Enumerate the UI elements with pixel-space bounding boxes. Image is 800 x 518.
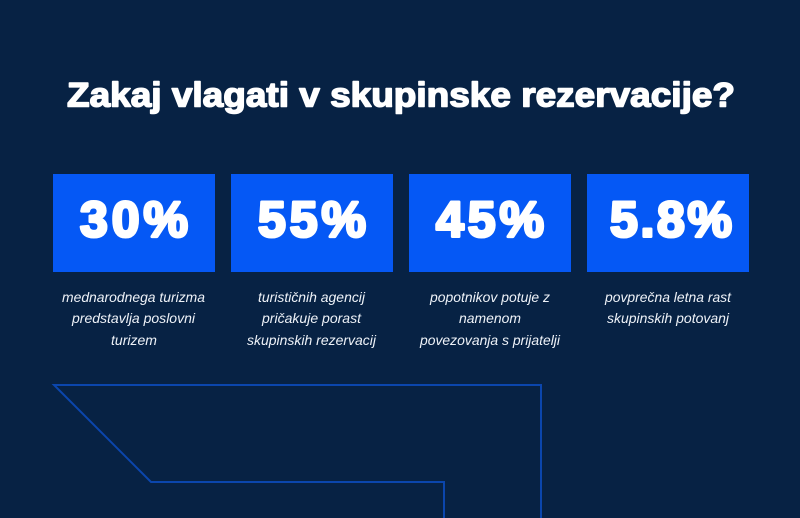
- caption 30%: [62, 289, 205, 348]
- caption 30%: mednarodnega turizma: [62, 289, 205, 305]
- caption 5.8%: povprečna letna rast: [604, 289, 732, 305]
- stat value 45%: 45%: [436, 192, 544, 248]
- caption 45%: popotnikov potuje z: [429, 289, 550, 305]
- caption 45%: [419, 289, 561, 348]
- stat value 55%: 55%: [258, 192, 366, 248]
- stat box 55%: [231, 174, 393, 272]
- panel: stat 5.8%: [587, 174, 749, 326]
- caption 30%: predstavlja poslovni: [71, 310, 196, 326]
- caption 55%: [247, 289, 377, 348]
- stat box 30%: [53, 174, 215, 272]
- caption 45%: povezovanja s prijatelji: [419, 332, 561, 348]
- caption 45%: namenom: [459, 310, 521, 326]
- panel: stat 45%: [409, 174, 571, 348]
- panel: stat 30%: [53, 174, 215, 348]
- title: Zakaj vlagati v skupinske rezervacije?: [67, 76, 735, 114]
- stat value 30%: 30%: [80, 192, 188, 248]
- caption 55%: pričakuje porast: [261, 310, 362, 326]
- stat box 5.8%: [587, 174, 749, 272]
- decorative outline shape: [54, 385, 541, 518]
- stat value 5.8%: 5.8%: [610, 192, 732, 248]
- caption 30%: turizem: [111, 332, 157, 348]
- caption 5.8%: skupinskih potovanj: [607, 310, 730, 326]
- caption 5.8%: [604, 289, 732, 326]
- caption 55%: turističnih agencij: [258, 289, 366, 305]
- caption 55%: skupinskih rezervacij: [247, 332, 377, 348]
- stat box 45%: [409, 174, 571, 272]
- panel: stat 55%: [231, 174, 393, 348]
